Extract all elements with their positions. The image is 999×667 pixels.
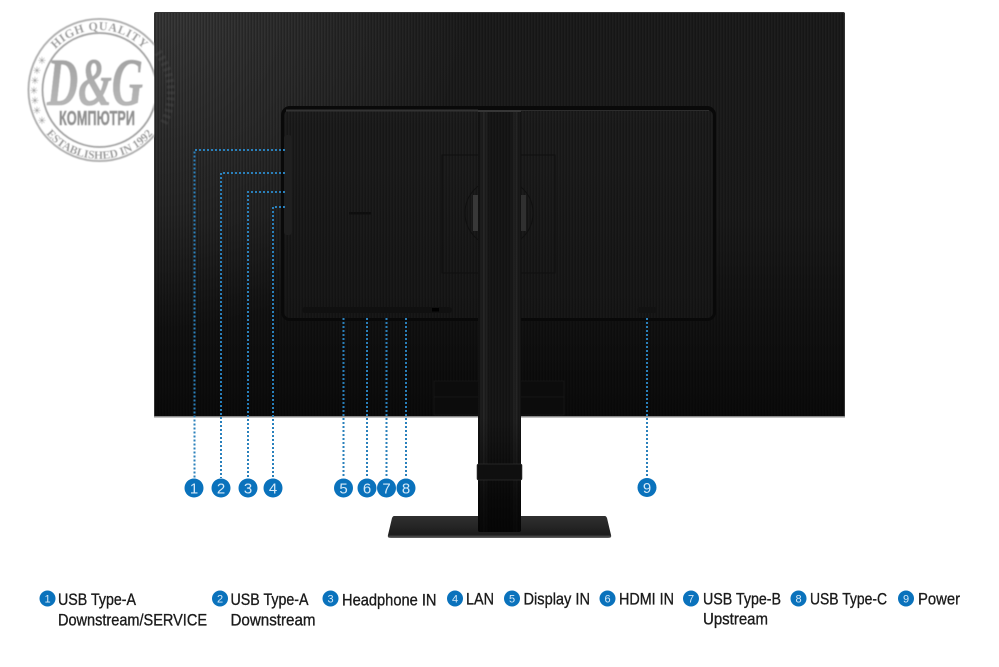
callout markers: 6 <box>363 480 371 498</box>
callout markers: 8 <box>402 480 410 498</box>
legend item 9 <box>898 590 960 608</box>
legend item 1: Downstream/SERVICE <box>58 610 207 630</box>
legend item 2 <box>212 590 316 630</box>
legend item 6: 6 <box>604 594 611 606</box>
legend item 8: 8 <box>795 594 802 606</box>
watermark logo: D&G <box>46 44 143 120</box>
rear vent blocks <box>434 381 564 415</box>
legend item 9: Power <box>918 590 960 608</box>
legend item 1: USB Type-A <box>58 590 137 609</box>
legend item 2: Downstream <box>230 610 316 630</box>
leader lines <box>194 150 647 478</box>
monitor back <box>154 12 845 418</box>
watermark logo: ESTABLISHED IN 1992 <box>46 128 153 160</box>
legend item 7: 7 <box>688 594 694 606</box>
legend item 9: 9 <box>903 594 909 606</box>
legend item 7: USB Type-B <box>703 590 781 608</box>
legend item 1: 1 <box>44 594 51 606</box>
watermark logo: ✳ <box>33 66 41 77</box>
watermark logo: ✳ <box>30 86 38 97</box>
legend item 8: USB Type-C <box>810 590 887 608</box>
stand base <box>388 516 611 538</box>
stand column <box>478 110 521 532</box>
cable clip <box>477 464 522 480</box>
watermark logo: ✳ <box>38 56 46 67</box>
watermark logo: HIGH QUALITY <box>50 22 149 50</box>
legend item 5 <box>504 590 590 608</box>
legend item 4: 4 <box>452 594 458 606</box>
legend item 3: Headphone IN <box>342 590 436 610</box>
legend item 7: Upstream <box>703 610 768 628</box>
rear connector panel <box>281 106 716 321</box>
legend item 6 <box>600 590 674 608</box>
callout markers: 9 <box>643 480 651 497</box>
watermark logo: КОМПЮТРИ <box>59 108 135 130</box>
legend item 4: LAN <box>466 590 494 608</box>
callout markers: 7 <box>382 480 391 498</box>
watermark logo <box>27 18 174 162</box>
legend item 8 <box>790 590 887 608</box>
legend item 6: HDMI IN <box>619 590 674 608</box>
watermark logo: ✳ <box>38 116 46 127</box>
legend item 2: USB Type-A <box>230 590 309 609</box>
callout markers: 1 <box>190 480 198 498</box>
legend item 4 <box>447 590 494 608</box>
legend <box>40 590 960 630</box>
callout markers <box>184 478 656 498</box>
callout markers: 2 <box>217 480 225 498</box>
legend item 5: Display IN <box>524 590 590 608</box>
watermark logo: ✳ <box>31 76 39 87</box>
watermark logo: ✳ <box>31 96 39 107</box>
callout markers: 3 <box>244 480 252 498</box>
callout markers: 4 <box>269 480 277 498</box>
legend item 3: 3 <box>327 594 334 606</box>
callout markers: 5 <box>339 480 348 498</box>
legend item 2: 2 <box>217 594 223 606</box>
legend item 7 <box>683 590 781 628</box>
legend item 1 <box>40 590 207 630</box>
watermark logo: ✳ <box>33 106 41 117</box>
legend item 5: 5 <box>509 594 515 606</box>
